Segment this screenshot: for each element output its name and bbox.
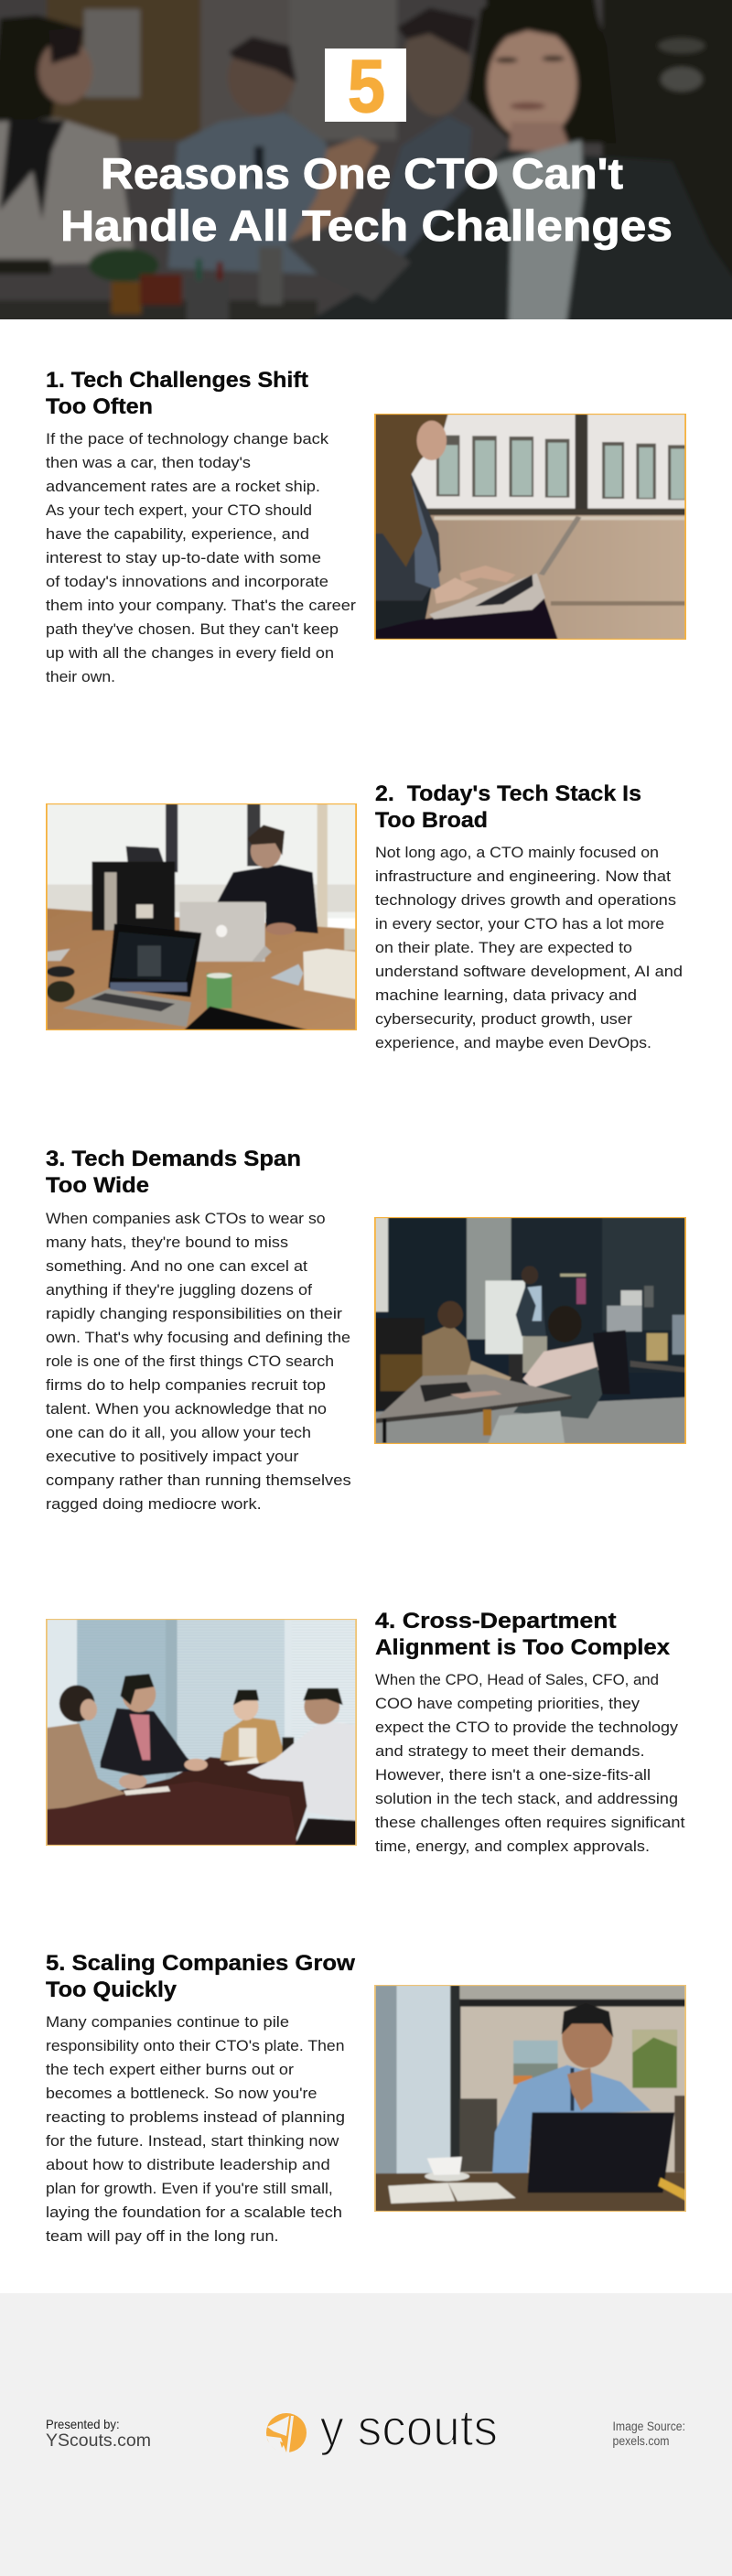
presented by credit <box>46 2417 151 2451</box>
photo: woman typing on laptop by window <box>360 405 700 646</box>
text block: reason 3: When companies ask CTOs to wear so <box>46 1211 326 1227</box>
text block: reason 1 <box>46 431 357 685</box>
heading: reason 1: Too Often <box>46 394 153 419</box>
text block: reason 2: understand software development, AI and <box>375 964 683 980</box>
photo: thoughtful man at laptop in cafe <box>360 1977 700 2221</box>
text block: reason 5: becomes a bottleneck. So now you're <box>46 2086 317 2102</box>
title <box>60 149 673 250</box>
presented by credit: YScouts.com <box>46 2430 151 2451</box>
text block: reason 1: advancement rates are a rocket ship. <box>46 479 320 495</box>
text block: reason 4 <box>375 1672 685 1855</box>
text block: reason 1: up with all the changes in every field on <box>46 645 334 662</box>
heading: reason 1: 1. Tech Challenges Shift <box>46 368 308 393</box>
blurred left woman <box>0 116 135 265</box>
image source credit <box>613 2420 685 2448</box>
blurred right man <box>369 116 471 256</box>
number badge: 5 <box>348 45 385 128</box>
text block: reason 3: executive to positively impact your <box>46 1449 299 1465</box>
heading: reason 3 <box>46 1147 301 1198</box>
wordmark: y scouts <box>320 2398 498 2456</box>
blurred centre man <box>168 113 327 275</box>
text block: reason 5: about how to distribute leadership and <box>46 2157 330 2173</box>
logo: y scouts <box>266 2398 498 2456</box>
heading: reason 2 <box>375 781 641 833</box>
text block: reason 5: team will pay off in the long run. <box>46 2228 279 2245</box>
text block: reason 4: However, there isn't a one-size-fits-all <box>375 1767 651 1784</box>
heading: reason 2: Too Broad <box>375 808 488 833</box>
text block: reason 5: Many companies continue to pile <box>46 2014 289 2031</box>
heading: reason 3: Too Wide <box>46 1173 149 1198</box>
text block: reason 1: If the pace of technology change back <box>46 431 329 447</box>
heading: reason 2: 2. Today's Tech Stack Is <box>375 781 641 806</box>
icon: logo mark <box>266 2413 307 2452</box>
overlay darkening <box>0 0 732 332</box>
hero banner <box>0 0 732 332</box>
text block: reason 5: for the future. Instead, start thinking now <box>46 2133 339 2150</box>
text block: reason 3: role is one of the first things CTO search <box>46 1353 334 1370</box>
number badge <box>325 45 406 128</box>
text block: reason 3: ragged doing mediocre work. <box>46 1496 262 1513</box>
text block: reason 1: of today's innovations and incorporate <box>46 574 328 590</box>
main woman <box>467 0 616 144</box>
panel: reason 4 <box>33 1609 685 1855</box>
heading: reason 4: Alignment is Too Complex <box>375 1635 671 1660</box>
text block: reason 4: and strategy to meet their demands. <box>375 1743 645 1760</box>
text block: reason 3: own. That's why focusing and defining the <box>46 1330 350 1346</box>
text block: reason 2: cybersecurity, product growth, user <box>375 1011 633 1028</box>
text block: reason 1: interest to stay up-to-date with some <box>46 550 321 566</box>
text block: reason 3: company rather than running themselves <box>46 1472 351 1489</box>
text block: reason 1: them into your company. That's the career <box>46 598 357 614</box>
text block: reason 5: reacting to problems instead of planning <box>46 2109 345 2126</box>
text block: reason 5 <box>46 2014 345 2245</box>
heading: reason 1 <box>46 368 308 419</box>
text block: reason 5: plan for growth. Even if you're still small, <box>46 2181 333 2197</box>
text block: reason 3: firms do to help companies recruit top <box>46 1377 326 1394</box>
text block: reason 2: in every sector, your CTO has a lot more <box>375 916 664 932</box>
text block: reason 2: machine learning, data privacy and <box>375 987 637 1004</box>
text block: reason 1: As your tech expert, your CTO should <box>46 502 312 519</box>
text block: reason 5: responsibility onto their CTO's plate. Then <box>46 2038 344 2054</box>
heading: reason 5 <box>46 1951 355 2002</box>
table and desk items <box>0 300 318 332</box>
text block: reason 3: rapidly changing responsibilities on their <box>46 1306 343 1322</box>
photo: man working at desk with laptops <box>33 796 373 1040</box>
panel: reason 1 <box>46 368 700 685</box>
text block: reason 3: one can do it all, you allow your tech <box>46 1425 311 1441</box>
text block: reason 2: on their plate. They are expected to <box>375 940 632 956</box>
photo: four colleagues meeting at boardroom table <box>33 1611 373 1852</box>
text block: reason 1: then was a car, then today's <box>46 455 251 471</box>
text block: reason 5: the tech expert either burns out or <box>46 2062 295 2078</box>
text block: reason 2: infrastructure and engineering. Now that <box>375 868 671 885</box>
text block: reason 1: their own. <box>46 669 115 685</box>
text block: reason 4: COO have competing priorities, they <box>375 1696 640 1712</box>
title: Handle All Tech Challenges <box>60 201 673 250</box>
text block: reason 4: expect the CTO to provide the technology <box>375 1719 679 1736</box>
hero photo: businesswoman and colleagues <box>0 0 732 319</box>
text block: reason 4: When the CPO, Head of Sales, CFO, and <box>375 1672 659 1688</box>
text block: reason 3: something. And no one can excel at <box>46 1258 307 1275</box>
text block: reason 1: path they've chosen. But they can't keep <box>46 621 339 638</box>
text block: reason 1: have the capability, experience, and <box>46 526 309 543</box>
text block: reason 2: experience, and maybe even DevOps. <box>375 1035 651 1051</box>
photo: presenter at flip chart in dark office <box>360 1208 700 1452</box>
panel: reason 2 <box>33 781 683 1051</box>
text block: reason 4: solution in the tech stack, and addressing <box>375 1791 678 1807</box>
panel: reason 5 <box>46 1951 700 2245</box>
text block: reason 3 <box>46 1211 351 1513</box>
text block: reason 5: laying the foundation for a scalable tech <box>46 2204 342 2221</box>
text block: reason 4: these challenges often requires significant <box>375 1815 685 1831</box>
heading: reason 3: 3. Tech Demands Span <box>46 1147 301 1171</box>
image source credit: Image Source: <box>613 2420 685 2433</box>
text block: reason 3: talent. When you acknowledge that no <box>46 1401 327 1417</box>
heading: reason 4: 4. Cross-Department <box>375 1609 617 1633</box>
image source credit: pexels.com <box>613 2434 670 2448</box>
heading: reason 4 <box>375 1609 671 1660</box>
text block: reason 2: Not long ago, a CTO mainly focused on <box>375 845 659 861</box>
title: Reasons One CTO Can't <box>101 149 623 198</box>
presented by credit: Presented by: <box>46 2417 120 2431</box>
text block: reason 3: anything if they're juggling dozens of <box>46 1282 312 1299</box>
text block: reason 3: many hats, they're bound to miss <box>46 1234 288 1251</box>
text block: reason 2 <box>375 845 683 1051</box>
panel: reason 3 <box>46 1147 700 1513</box>
text block: reason 4: time, energy, and complex approvals. <box>375 1838 650 1855</box>
text block: reason 2: technology drives growth and operations <box>375 892 676 909</box>
heading: reason 5: 5. Scaling Companies Grow <box>46 1951 355 1976</box>
footer panel <box>0 2293 732 2576</box>
heading: reason 5: Too Quickly <box>46 1978 178 2002</box>
